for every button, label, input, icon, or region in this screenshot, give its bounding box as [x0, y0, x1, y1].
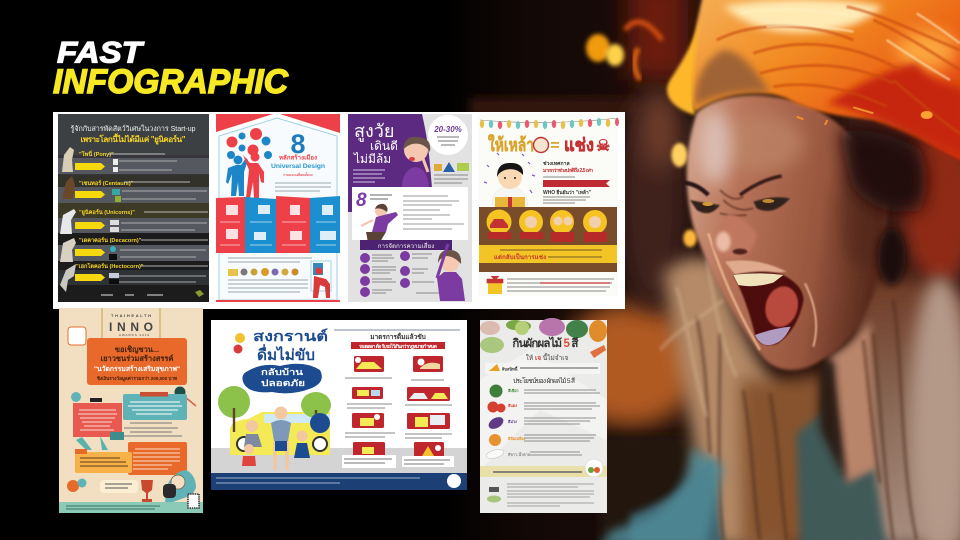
QR code	[188, 494, 199, 508]
white card	[352, 187, 468, 240]
red card	[73, 398, 122, 437]
title group: ปลอดภัย	[261, 378, 305, 388]
white caption boxes	[342, 455, 454, 468]
car window	[264, 414, 330, 423]
partner logos	[228, 268, 298, 276]
title group: ดื่มไม่ขับ	[257, 344, 315, 364]
right text block: ช่วงเทศกาล	[543, 160, 570, 167]
heading	[488, 134, 610, 155]
heading: มาตรการดื่มแล้วขับ	[370, 331, 426, 341]
orange card: "นวัตกรรมสร้างเสริมสุขภาพ"	[94, 364, 180, 373]
vegetable icons	[485, 384, 506, 460]
title group: กลับบ้าน	[261, 367, 303, 377]
background glow	[470, 0, 710, 540]
infographic: five colour vegetables	[480, 318, 607, 513]
bright highlight	[723, 0, 883, 33]
dark hair under	[840, 130, 926, 212]
purple band left	[348, 187, 352, 212]
woman	[402, 137, 430, 188]
orange card: ชิงเงินรางวัลมูลค่ารวมกว่า 200,000 บาท	[97, 375, 177, 382]
yellow side flames	[667, 13, 702, 115]
dark lower area	[58, 233, 209, 302]
logo	[195, 290, 204, 297]
title group	[234, 328, 328, 393]
title: กินผักผลไม้ 5 สี	[512, 336, 579, 350]
bottom logos	[487, 487, 501, 502]
sponsor strip: สิบสนิทนี้	[501, 364, 518, 372]
forehead highlight	[698, 110, 732, 183]
red heading band: รองผลลา ต้อ รับรถไว้เกินกว่ากฎหมายกำหนด	[359, 343, 437, 350]
infographic: songkran	[211, 320, 467, 490]
benefit labels: สีม่วง	[507, 419, 517, 424]
top vegetables	[480, 318, 607, 358]
brow wrinkles	[720, 190, 753, 216]
heading: แช่ง	[564, 135, 594, 155]
nose	[713, 213, 757, 259]
benefit text	[524, 390, 600, 455]
yellow tags	[75, 163, 105, 281]
tan roots	[693, 50, 770, 107]
horses	[60, 147, 76, 292]
heading: หลักสร้างเมือง	[279, 154, 317, 162]
roof	[216, 114, 340, 133]
caption lines	[345, 378, 452, 438]
title group: สงกรานต์	[253, 328, 328, 344]
red cards	[352, 356, 450, 457]
forehead tone	[717, 115, 803, 172]
benefit labels	[507, 388, 531, 457]
row text lines	[108, 154, 208, 282]
gears	[67, 392, 86, 492]
teal card	[123, 392, 187, 420]
text lines	[275, 183, 331, 191]
shirt	[630, 457, 723, 540]
footer text	[507, 279, 614, 291]
heading: เพราะโลกนี้ไม่ได้มีแค่ "ยูนิคอร์น"	[80, 133, 186, 145]
company logos	[109, 159, 121, 284]
flowers	[235, 333, 245, 343]
books	[163, 484, 176, 498]
benefit labels: สีเขียว	[507, 388, 519, 393]
purple icons	[360, 251, 410, 297]
mouth	[733, 272, 803, 345]
heading: รู้จักกับสารพัดสัตว์วิเศษในวงการ Start-up	[71, 124, 196, 133]
red labels	[488, 232, 607, 242]
boy	[492, 163, 528, 207]
lower text	[228, 258, 312, 292]
title: ให้ เจ นี้ไม่จำเจ	[526, 353, 568, 362]
window and old person	[311, 261, 331, 298]
icon circles	[486, 210, 607, 234]
footer text	[216, 478, 420, 483]
orange lower card	[128, 442, 187, 475]
number 8: 8	[356, 190, 367, 211]
title: INFOGRAPHIC	[53, 63, 288, 101]
logo circle	[447, 474, 461, 488]
pale strands	[740, 10, 960, 80]
yellow right highlight	[897, 30, 957, 70]
heading	[370, 195, 392, 199]
trees	[218, 386, 331, 432]
row headings: "โพนี่ (Pony)"	[79, 150, 114, 158]
heading	[271, 154, 325, 177]
title	[512, 336, 579, 362]
row bands	[58, 158, 209, 285]
neck	[828, 320, 877, 483]
eyes	[690, 197, 790, 213]
infographic: inno awards	[59, 308, 203, 513]
wheels	[237, 437, 327, 451]
plate	[585, 459, 603, 477]
stat circle	[428, 115, 468, 155]
yellow car	[230, 412, 330, 455]
dark badge	[310, 413, 330, 433]
background flames	[586, 22, 662, 80]
face	[687, 95, 888, 370]
white panel behind top infographics	[53, 112, 625, 309]
exercising woman	[437, 244, 465, 301]
header: AWARDS 2019	[119, 333, 149, 337]
infographic: startup animals	[58, 114, 209, 302]
left wisps	[660, 260, 737, 417]
color blocks	[216, 196, 340, 253]
footer credits	[101, 294, 163, 296]
contact pill	[100, 480, 138, 493]
eyebrows	[683, 176, 782, 195]
hair back and lower strands	[663, 100, 960, 540]
brown band	[479, 207, 617, 272]
yellow band	[479, 245, 617, 263]
title: เดินดี	[370, 139, 398, 153]
crumple texture	[480, 350, 607, 470]
risk list	[403, 196, 464, 229]
people	[226, 152, 264, 198]
logos	[434, 162, 469, 183]
photo: screaming woman with flaming hair	[470, 0, 960, 540]
hair flow strands	[717, 7, 960, 133]
right text block	[543, 160, 610, 203]
red heading band	[351, 342, 445, 350]
temple shadow	[840, 157, 883, 270]
sleeve left part	[600, 448, 724, 540]
header	[109, 313, 153, 337]
bottom bar	[216, 300, 340, 302]
infographic: elderly falls	[348, 114, 472, 302]
bottom text	[507, 484, 594, 506]
purple heading band	[360, 240, 452, 250]
big number: 8	[290, 129, 306, 159]
right text block: WHO ยืนยันว่า "เหล้า"	[543, 189, 592, 196]
sponsor strip	[485, 363, 600, 374]
logo	[68, 327, 86, 345]
infographic: alcohol gift	[478, 114, 624, 304]
footer text	[66, 506, 160, 509]
yellow band: แต่กลับเป็นการแช่ง	[494, 252, 546, 261]
stat circle: 20-30%	[433, 125, 462, 134]
house outline	[219, 118, 337, 300]
title	[53, 36, 288, 101]
purple heading band: การจัดการความเสี่ยง	[378, 242, 434, 250]
center text	[122, 423, 182, 436]
ear and earring	[878, 228, 906, 285]
title: สูงวัย	[354, 121, 394, 142]
car icons	[355, 357, 448, 456]
magnifier	[174, 386, 196, 406]
falling woman	[361, 204, 398, 248]
heading: Universal Design	[271, 163, 325, 170]
title	[353, 121, 398, 166]
gift box	[487, 276, 503, 294]
splash	[242, 364, 322, 393]
title: ไม่มีล้ม	[353, 152, 391, 166]
character desk	[110, 432, 124, 440]
benefit labels: สีส้มเหลือง	[507, 435, 526, 441]
hanging ropes	[102, 308, 160, 338]
shirt front	[797, 410, 887, 540]
string lights	[480, 118, 619, 129]
benefit labels: สีแดง	[507, 403, 517, 408]
orange card: ขอเชิญชวน...	[115, 345, 159, 354]
heading: ☠	[596, 138, 610, 155]
text lines	[353, 170, 385, 182]
navy footer	[211, 473, 467, 490]
orange card: เยาวชนร่วมสร้างสรรค์	[101, 354, 173, 363]
row headings: "เดคาคอร์น (Decacorn)"	[79, 236, 142, 244]
row headings: "เซนทอร์ (Centaurs)"	[79, 179, 134, 187]
teal desk	[76, 436, 108, 450]
infographic: universal design	[216, 114, 340, 302]
yellow band	[480, 466, 607, 477]
confetti	[484, 153, 535, 193]
road	[211, 448, 467, 473]
heading: ให้เหล้า	[488, 134, 534, 155]
row headings: "เฮกโตคอร์น (Hectocorn)"	[76, 262, 144, 270]
purple header shape	[348, 114, 432, 212]
right header text	[334, 329, 460, 331]
orange card	[87, 338, 187, 385]
chin shadow	[820, 360, 843, 477]
heading: การออกแบบเพื่อคนทั้งมวล	[283, 172, 313, 177]
mountain backdrop	[58, 114, 209, 155]
icon bubbles	[226, 128, 272, 159]
teal footer	[59, 502, 203, 513]
row headings: "ยูนิคอร์น (Unicorns)"	[79, 208, 135, 217]
right text block: มากกว่าช่วงปกติถึง 2.5 เท่า	[543, 167, 593, 174]
benefit labels: สีขาว-น้ำตาล	[507, 451, 531, 457]
woman figure	[630, 0, 960, 540]
jaw rim	[805, 283, 816, 347]
upper lip	[725, 260, 787, 277]
title: FAST	[57, 36, 145, 70]
family	[242, 406, 310, 470]
heading	[71, 124, 196, 145]
header: THAIHEALTH	[111, 313, 151, 318]
trophy	[141, 480, 153, 503]
row headings	[76, 150, 144, 270]
red streak	[827, 63, 960, 157]
brain head	[165, 470, 196, 505]
tip text	[372, 254, 440, 293]
header: INNO	[109, 320, 153, 334]
ember marks	[797, 107, 873, 125]
flaming hair	[667, 0, 960, 247]
right hair strands	[697, 300, 917, 540]
cheek highlights	[708, 233, 760, 350]
yellow card	[75, 449, 132, 473]
benefit heading: ประโยชน์ของ ผักผลไม้ 5 สี	[513, 377, 575, 385]
